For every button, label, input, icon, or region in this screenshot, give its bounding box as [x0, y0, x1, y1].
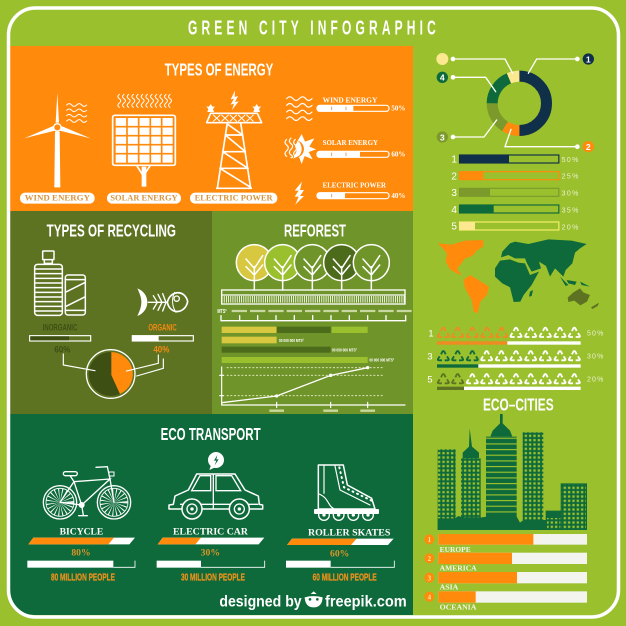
credit: designed by freepik: [219, 591, 407, 610]
icon: electric pylon: [206, 91, 262, 188]
recycling row 1: 1: [428, 328, 434, 338]
city bar: europe: 1: [428, 536, 432, 544]
credit: designed by freepik: designed by: [219, 593, 302, 610]
stat: bicycle: 80 MILLION PEOPLE: [51, 573, 115, 584]
recycling row 3: [427, 374, 603, 390]
heading: reforest: REFOREST: [284, 220, 346, 240]
city bar: oceania: 4: [428, 593, 432, 601]
icon: wind turbine: [24, 93, 91, 187]
legend bar 2: 2: [451, 171, 457, 182]
bar: inorganic 60%: [30, 336, 91, 341]
label: wind energy: [20, 193, 95, 204]
stat: roller skates: ROLLER SKATES: [308, 528, 390, 538]
callout 4: [437, 72, 496, 92]
heading: eco transport: ECO TRANSPORT: [161, 424, 261, 444]
city bar: oceania: [424, 591, 587, 612]
city bar: europe: EUROPE: [440, 546, 471, 554]
stat: wind energy bar: [317, 97, 405, 113]
area scale: [217, 309, 412, 321]
recycling row 2: 30%: [587, 354, 603, 361]
stat: electric power bar: [317, 181, 405, 200]
section: eco transport: [27, 424, 407, 610]
callout 4: 4: [440, 73, 445, 83]
stat: bicycle: 80%: [71, 547, 91, 557]
stat: electric car: 30 MILLION PEOPLE: [181, 573, 245, 584]
section: reforest: [217, 220, 412, 411]
stat: solar energy bar: [317, 139, 405, 159]
recycling row 2: 3: [427, 352, 433, 362]
icon: electric car: [169, 452, 263, 519]
trees: [236, 245, 389, 290]
legend bar 3: 30%: [562, 191, 578, 198]
legend bar 2: [451, 171, 578, 182]
city bar: asia: 3: [428, 574, 432, 582]
label: inorganic: INORGANIC: [43, 322, 78, 332]
donut chart: [492, 76, 546, 130]
legend bar 5: [451, 222, 578, 233]
legend bar 3: [451, 188, 578, 199]
stat: electric power bar: ELECTRIC POWER: [323, 181, 387, 189]
stat: bicycle: BICYCLE: [60, 527, 103, 537]
stat: bicycle: [27, 527, 135, 584]
heading: types of recycling: TYPES OF RECYCLING: [47, 220, 176, 240]
recycling row 3: 20%: [587, 377, 603, 384]
label: electric power: ELECTRIC POWER: [195, 194, 273, 203]
legend bar 4: [451, 205, 578, 216]
callout 1: [528, 53, 594, 73]
label: electric power: [190, 193, 277, 204]
city bar: america: [424, 553, 587, 573]
panel: reforest background: [212, 211, 413, 415]
icon: lightning bolt: [295, 182, 304, 205]
callout 3: [437, 120, 497, 143]
legend bar 5: 5: [451, 222, 457, 233]
icon: sun with heat waves: [285, 134, 316, 164]
callout 2: 2: [586, 142, 591, 152]
recycling row 1: [428, 328, 603, 345]
value: 40%: 40%: [153, 345, 170, 355]
stat: electric car: ELECTRIC CAR: [173, 527, 249, 537]
city bar: america: 2: [428, 555, 432, 563]
icon: bicycle: [43, 467, 131, 519]
stat: roller skates: 60%: [330, 548, 349, 558]
legend bar 1: [451, 155, 578, 166]
city bar: europe: [424, 534, 587, 554]
pie chart: [63, 350, 163, 398]
callout 5: [436, 53, 513, 73]
icon: roller skate: [314, 465, 379, 520]
panel: types of recycling background: [10, 211, 212, 415]
callout 2: [505, 129, 594, 152]
panel: eco transport background: [10, 414, 413, 615]
icon: solar panel: [113, 94, 175, 187]
stat: electric car: 30%: [201, 547, 220, 557]
stat: electric power bar: 40%: [391, 192, 405, 200]
stat: solar energy bar: SOLAR ENERGY: [323, 139, 378, 147]
legend bar 5: 20%: [562, 224, 578, 231]
icon: fish bone: [137, 288, 188, 316]
line chart: [220, 366, 405, 411]
icon: wind waves small: [287, 97, 312, 120]
section: types of energy: [20, 60, 405, 205]
label: solar energy: SOLAR ENERGY: [110, 194, 178, 203]
stat: roller skates: [286, 528, 394, 584]
ground strip: [222, 290, 405, 304]
legend bar 2: 25%: [562, 174, 578, 181]
legend bar 1: 1: [451, 155, 457, 166]
stat: electric car: [157, 527, 265, 584]
panel: types of energy background: [10, 46, 413, 211]
legend bar 3: 3: [451, 188, 457, 199]
recycling row 2: [427, 351, 603, 368]
bar chart: stacked reforestation: 00 000 000 MTS²: [369, 358, 394, 364]
callout 3: 3: [440, 132, 445, 142]
credit: designed by freepik: freepik.com: [325, 593, 407, 610]
icon: drink can: [65, 275, 85, 315]
world map: [438, 239, 599, 313]
heading: eco-cities: ECO–CITIES: [483, 395, 554, 415]
skyline: [438, 414, 587, 530]
bar chart: stacked reforestation: [222, 327, 394, 364]
city bar: oceania: OCEANIA: [440, 604, 476, 612]
stat: solar energy bar: 60%: [391, 151, 405, 159]
stat: roller skates: 60 MILLION PEOPLE: [313, 573, 377, 584]
callout 1: 1: [586, 54, 591, 64]
city bar: america: AMERICA: [440, 565, 477, 573]
legend bar 4: 4: [451, 205, 457, 216]
bar chart: stacked reforestation: 00 000 000 MTS²: [279, 338, 304, 344]
label: wind energy: WIND ENERGY: [25, 194, 90, 203]
value: 60%: 60%: [54, 345, 71, 355]
section: donut and legend bars: [436, 53, 594, 233]
area scale: MTS²: [217, 309, 227, 315]
bar: organic 40%: [132, 336, 193, 341]
stat: wind energy bar: 50%: [391, 105, 405, 113]
recycling row 3: 5: [427, 375, 433, 385]
section: types of recycling: [30, 220, 193, 398]
label: organic: ORGANIC: [148, 322, 177, 332]
stat: wind energy bar: WIND ENERGY: [323, 97, 377, 105]
legend bar 1: 50%: [562, 157, 578, 164]
heading: types of energy: TYPES OF ENERGY: [165, 60, 273, 80]
recycling row 1: 50%: [587, 330, 603, 337]
bar chart: stacked reforestation: 00 000 000 MTS²: [332, 348, 357, 354]
section: world map and recycling rows: [427, 239, 603, 390]
city bar: asia: [424, 572, 587, 592]
icon: plastic bottle: [35, 251, 62, 315]
title: GREEN CITY INFOGRAPHIC: [188, 18, 436, 39]
section: eco-cities: [424, 395, 587, 612]
legend bar 4: 35%: [562, 207, 578, 214]
city bar: asia: ASIA: [440, 584, 458, 592]
